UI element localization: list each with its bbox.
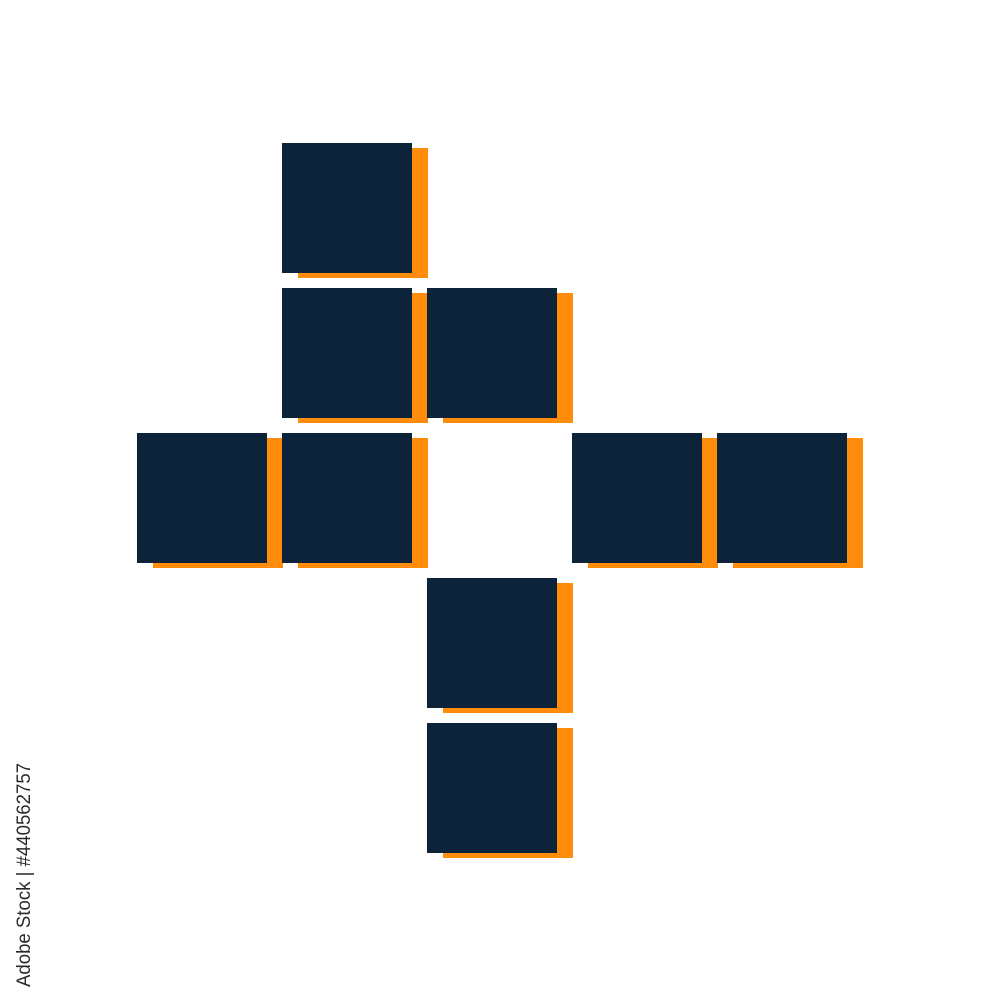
orange shadows	[153, 148, 863, 858]
stock credit text: Adobe Stock | #440562757	[14, 763, 35, 987]
navy squares	[137, 143, 847, 853]
